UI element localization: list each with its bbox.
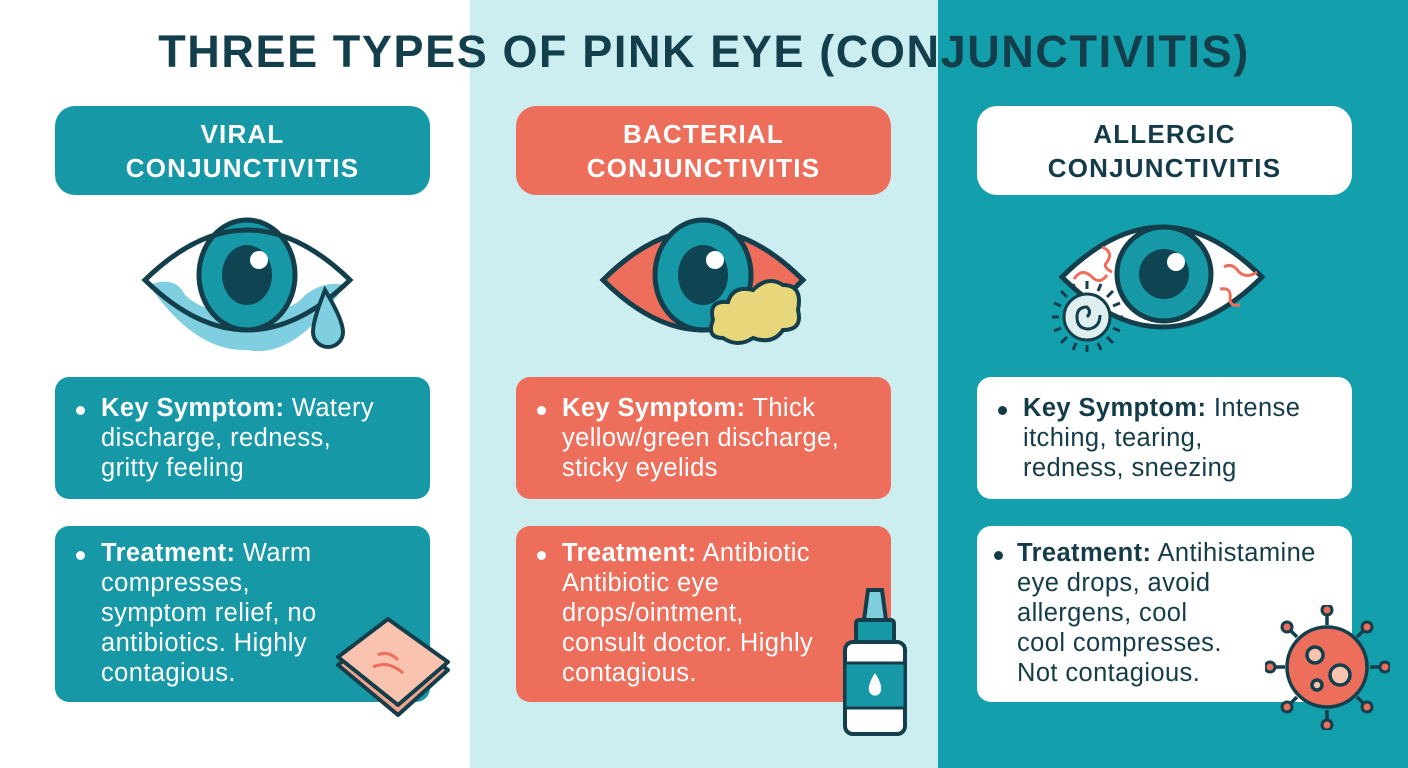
panel: allergic treatment: cool compresses.: [1017, 629, 1222, 657]
panel: bacterial treatment: consult doctor. Highly: [562, 629, 813, 657]
panel: viral treatment: Treatment: Warm: [101, 539, 312, 567]
icon: watery eye: [142, 218, 354, 352]
header: allergic: [977, 106, 1352, 195]
panel: bacterial treatment: drops/ointment,: [562, 599, 744, 627]
panel: allergic treatment: Not contagious.: [1017, 659, 1200, 687]
icon: allergen germ: [1265, 605, 1390, 730]
icon: eye drop bottle: [843, 588, 907, 736]
panel: viral treatment: antibiotics. Highly: [101, 629, 307, 657]
header: allergic: CONJUNCTIVITIS: [1048, 152, 1281, 182]
panel: viral symptom: gritty feeling: [101, 454, 244, 482]
panel: viral treatment: [55, 526, 430, 702]
header: allergic: ALLERGIC: [1093, 118, 1236, 148]
header: viral: CONJUNCTIVITIS: [126, 152, 359, 182]
header: viral: VIRAL: [200, 118, 284, 148]
panel: allergic symptom: itching, tearing,: [1023, 424, 1203, 452]
panel: allergic symptom: Key Symptom: Intense: [1023, 394, 1300, 422]
panel: bacterial treatment: [516, 526, 891, 702]
panel: bacterial symptom: [516, 377, 891, 499]
panel: bacterial treatment: Antibiotic eye: [562, 569, 719, 597]
panel: allergic symptom: redness, sneezing: [1023, 454, 1237, 482]
panel: allergic treatment: [977, 526, 1352, 702]
title: THREE TYPES OF PINK EYE (CONJUNCTIVITIS): [158, 26, 1250, 77]
panel: allergic treatment: Treatment: Antihistamine: [1017, 539, 1316, 567]
panel: viral symptom: discharge, redness,: [101, 424, 331, 452]
header: bacterial: BACTERIAL: [623, 118, 784, 148]
header: bacterial: CONJUNCTIVITIS: [587, 152, 820, 182]
icon: red eye with discharge: [600, 218, 806, 345]
panel: bacterial symptom: yellow/green discharge,: [562, 424, 839, 452]
panel: viral symptom: Key Symptom: Watery: [101, 394, 374, 422]
panel: allergic treatment: eye drops, avoid: [1017, 569, 1211, 597]
icon: itchy eye with pollen: [1052, 224, 1266, 352]
panel: allergic symptom: [977, 377, 1352, 499]
header: viral: [55, 106, 430, 195]
panel: allergic treatment: allergens, cool: [1017, 599, 1187, 627]
icon: compress cloth: [336, 617, 450, 718]
panel: bacterial treatment: contagious.: [562, 659, 697, 687]
header: bacterial: [516, 106, 891, 195]
panel: bacterial symptom: Key Symptom: Thick: [562, 394, 815, 422]
panel: bacterial symptom: sticky eyelids: [562, 454, 718, 482]
panel: viral treatment: contagious.: [101, 659, 236, 687]
panel: viral treatment: compresses,: [101, 569, 250, 597]
panel: viral symptom: [55, 377, 430, 499]
panel: viral treatment: symptom relief, no: [101, 599, 317, 627]
panel: bacterial treatment: Treatment: Antibiotic: [562, 539, 810, 567]
